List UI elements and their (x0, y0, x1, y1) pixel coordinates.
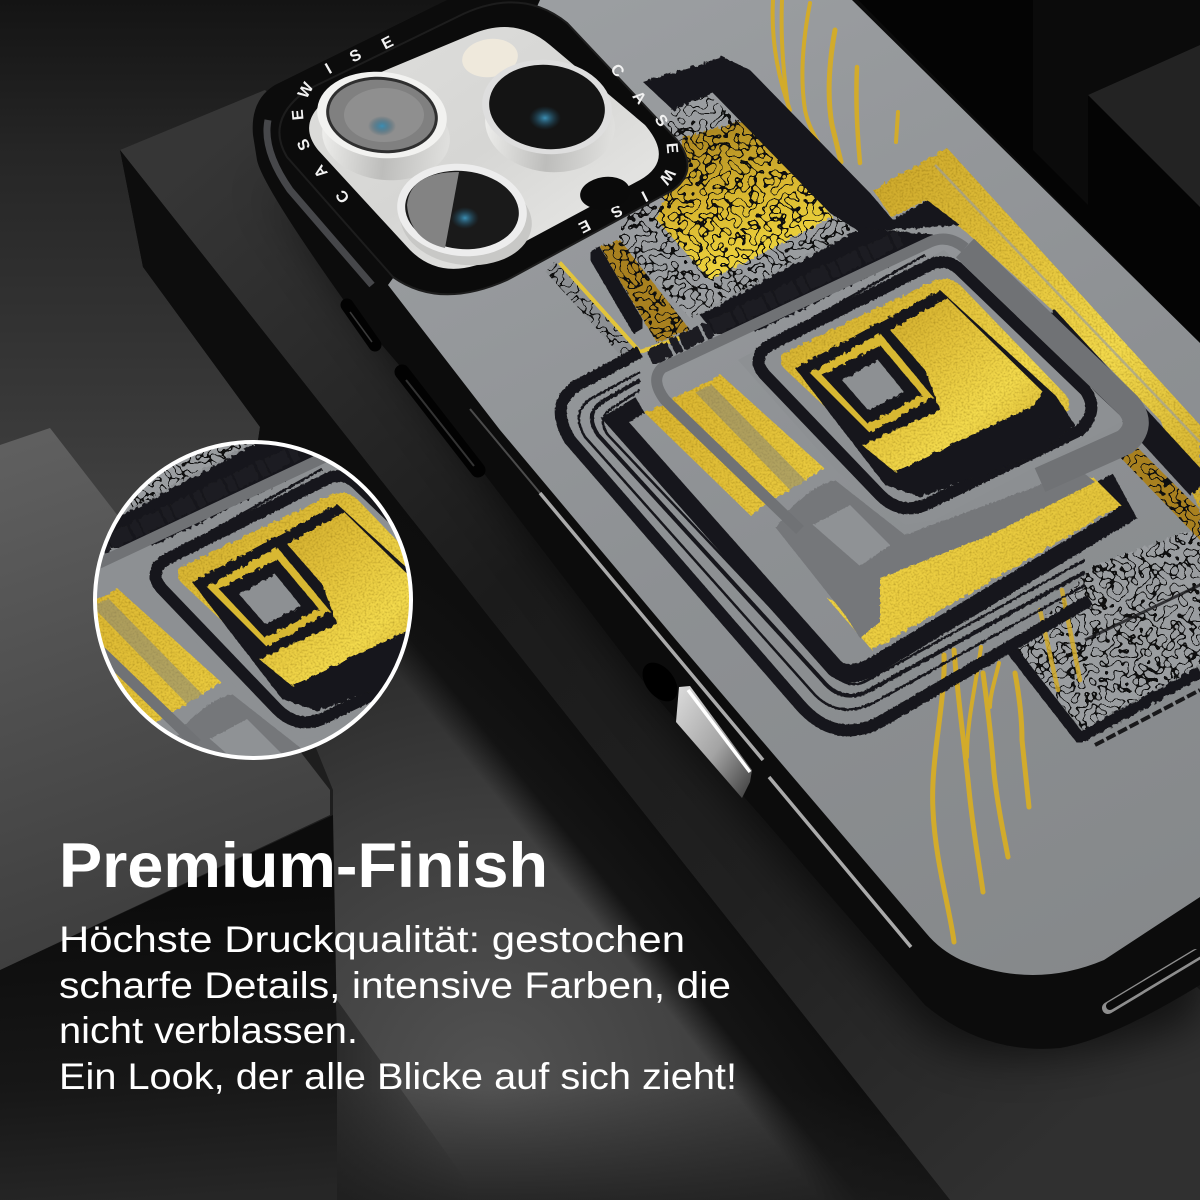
ring lettering: E (575, 216, 593, 236)
lower right texture (1010, 318, 1200, 745)
ring lettering: I (323, 61, 335, 78)
ring lettering: E (379, 33, 397, 53)
ring lettering (290, 33, 680, 236)
black band in gold square (795, 290, 1075, 497)
ring lettering: I (638, 187, 650, 204)
grey ghost overlay (776, 470, 1095, 638)
gold strokes lower (933, 590, 1080, 942)
inner black ring (756, 255, 1091, 508)
mid grey ring (657, 239, 1136, 530)
lens: bottom (393, 157, 536, 272)
edge reflection (470, 409, 911, 947)
inner panel (1094, 391, 1122, 422)
case rim highlight (267, 120, 372, 285)
camera glass (309, 27, 659, 269)
gold fill inner (862, 298, 1043, 472)
body text: scharfe Details, intensive Farben, die (59, 965, 731, 1006)
magnified detail circle (93, 440, 413, 760)
gold strokes top (773, 0, 898, 163)
ring lettering: E (290, 108, 307, 121)
ring lettering: A (311, 161, 331, 181)
body text (59, 919, 737, 1097)
ring lettering: C (607, 61, 627, 81)
flash (460, 35, 520, 81)
gold bar left (645, 375, 824, 515)
lens: top right (477, 53, 620, 179)
ring lettering: S (651, 112, 671, 130)
charging port (1108, 953, 1198, 1008)
ring lettering: A (629, 88, 649, 108)
ring lettering: S (294, 136, 314, 153)
side buttons (347, 305, 752, 798)
artwork on phone back (546, 0, 1200, 942)
gold bar bottom (826, 477, 1121, 650)
microphone hole (578, 174, 632, 212)
ring lettering: S (607, 201, 625, 221)
gold band right (873, 148, 1200, 510)
phone shadow (263, 180, 1200, 1055)
ring lettering: W (655, 165, 678, 188)
body text: nicht verblassen. (59, 1010, 358, 1051)
heading: Premium-Finish (59, 831, 548, 901)
upper texture square (546, 57, 960, 364)
phone case body (253, 0, 1200, 1049)
body text: Höchste Druckqualität: gestochen (59, 919, 685, 960)
grey back panel (388, 0, 1200, 975)
small square (810, 333, 933, 433)
camera island ring (279, 2, 688, 294)
ring lettering: W (295, 79, 318, 102)
lower frame lines (561, 352, 1125, 730)
ring lettering: S (347, 46, 365, 66)
ring lettering: E (663, 142, 680, 155)
lens: top left (313, 65, 454, 186)
gold square (780, 278, 1070, 480)
ring lettering: C (333, 186, 353, 206)
body text: Ein Look, der alle Blicke auf sich zieht! (59, 1056, 737, 1097)
